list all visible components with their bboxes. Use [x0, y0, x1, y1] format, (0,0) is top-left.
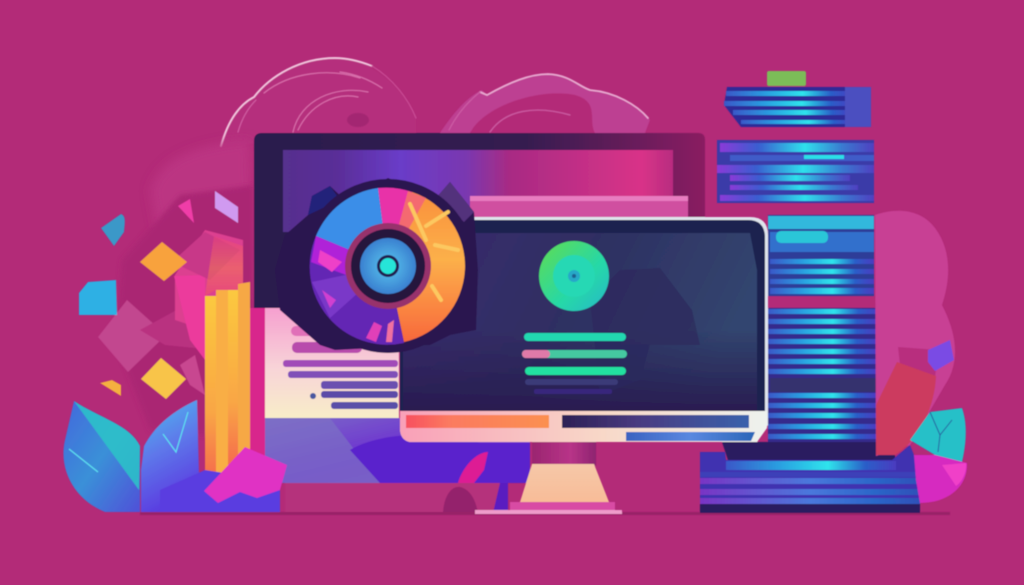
back monitor screen — [283, 150, 673, 232]
disk 2 — [717, 140, 874, 203]
disc: orange sector — [388, 192, 465, 342]
purple lower panel — [265, 418, 530, 483]
screen text lines — [522, 333, 627, 394]
shard: teal — [101, 214, 125, 246]
disc: violet wedge — [311, 236, 388, 280]
pink column beside document — [250, 308, 265, 483]
leaf: pink — [914, 455, 967, 503]
back monitor — [250, 133, 705, 483]
leaf: large teal blue — [63, 401, 140, 512]
disc: blue sector — [316, 188, 388, 266]
right side blob and leaves — [875, 211, 967, 503]
disc: coral wedge — [388, 191, 426, 266]
leaves left — [63, 400, 287, 512]
blob: red — [876, 362, 936, 455]
cloud: right outline — [440, 74, 650, 133]
disc: pink sector — [378, 188, 412, 266]
cloud: left outline — [221, 58, 416, 146]
shard: lilac — [215, 191, 238, 223]
stack dark plinth — [722, 442, 895, 460]
stack cap — [767, 71, 806, 86]
disc: purple sector — [310, 236, 404, 345]
shape: magenta cube — [204, 447, 287, 503]
background clouds — [150, 58, 650, 300]
disc hub — [345, 223, 431, 309]
cloud: left haze — [150, 140, 254, 300]
shape: purple — [928, 340, 954, 371]
leaf: teal — [910, 408, 966, 462]
shard: pink triangle — [178, 199, 194, 223]
leaf: blue facet — [141, 400, 200, 512]
base disk — [700, 445, 920, 513]
storage stack — [700, 71, 920, 513]
monitor screen — [403, 233, 757, 411]
floating shards — [79, 191, 238, 399]
artwork — [63, 58, 967, 515]
disc streaks — [318, 204, 458, 342]
monitor screen edge — [400, 220, 765, 411]
monitor chin — [400, 411, 767, 442]
disc with gear — [275, 178, 478, 353]
yellow bar bundle — [205, 236, 250, 490]
shard: cyan block — [79, 280, 117, 315]
polygon shards cluster — [98, 185, 254, 440]
green disc icon — [539, 241, 609, 311]
back monitor tab — [470, 196, 688, 218]
back monitor frame — [254, 133, 705, 308]
monitor stand — [475, 442, 622, 514]
blob: magenta cap — [898, 347, 938, 378]
blob: pink — [875, 211, 955, 456]
gear backing — [275, 178, 478, 350]
disk 3 — [768, 215, 874, 296]
monitor body — [400, 217, 768, 442]
shard: yellow diamond — [141, 358, 186, 399]
disk 4 — [768, 308, 878, 447]
disc outer ring — [301, 179, 475, 353]
leaf: violet base — [160, 470, 280, 512]
front monitor — [400, 217, 768, 514]
shard: small orange — [100, 380, 121, 396]
table ground — [140, 483, 950, 515]
document panel — [265, 308, 399, 418]
disk 1 — [724, 87, 871, 127]
shard: orange diamond — [140, 242, 187, 281]
